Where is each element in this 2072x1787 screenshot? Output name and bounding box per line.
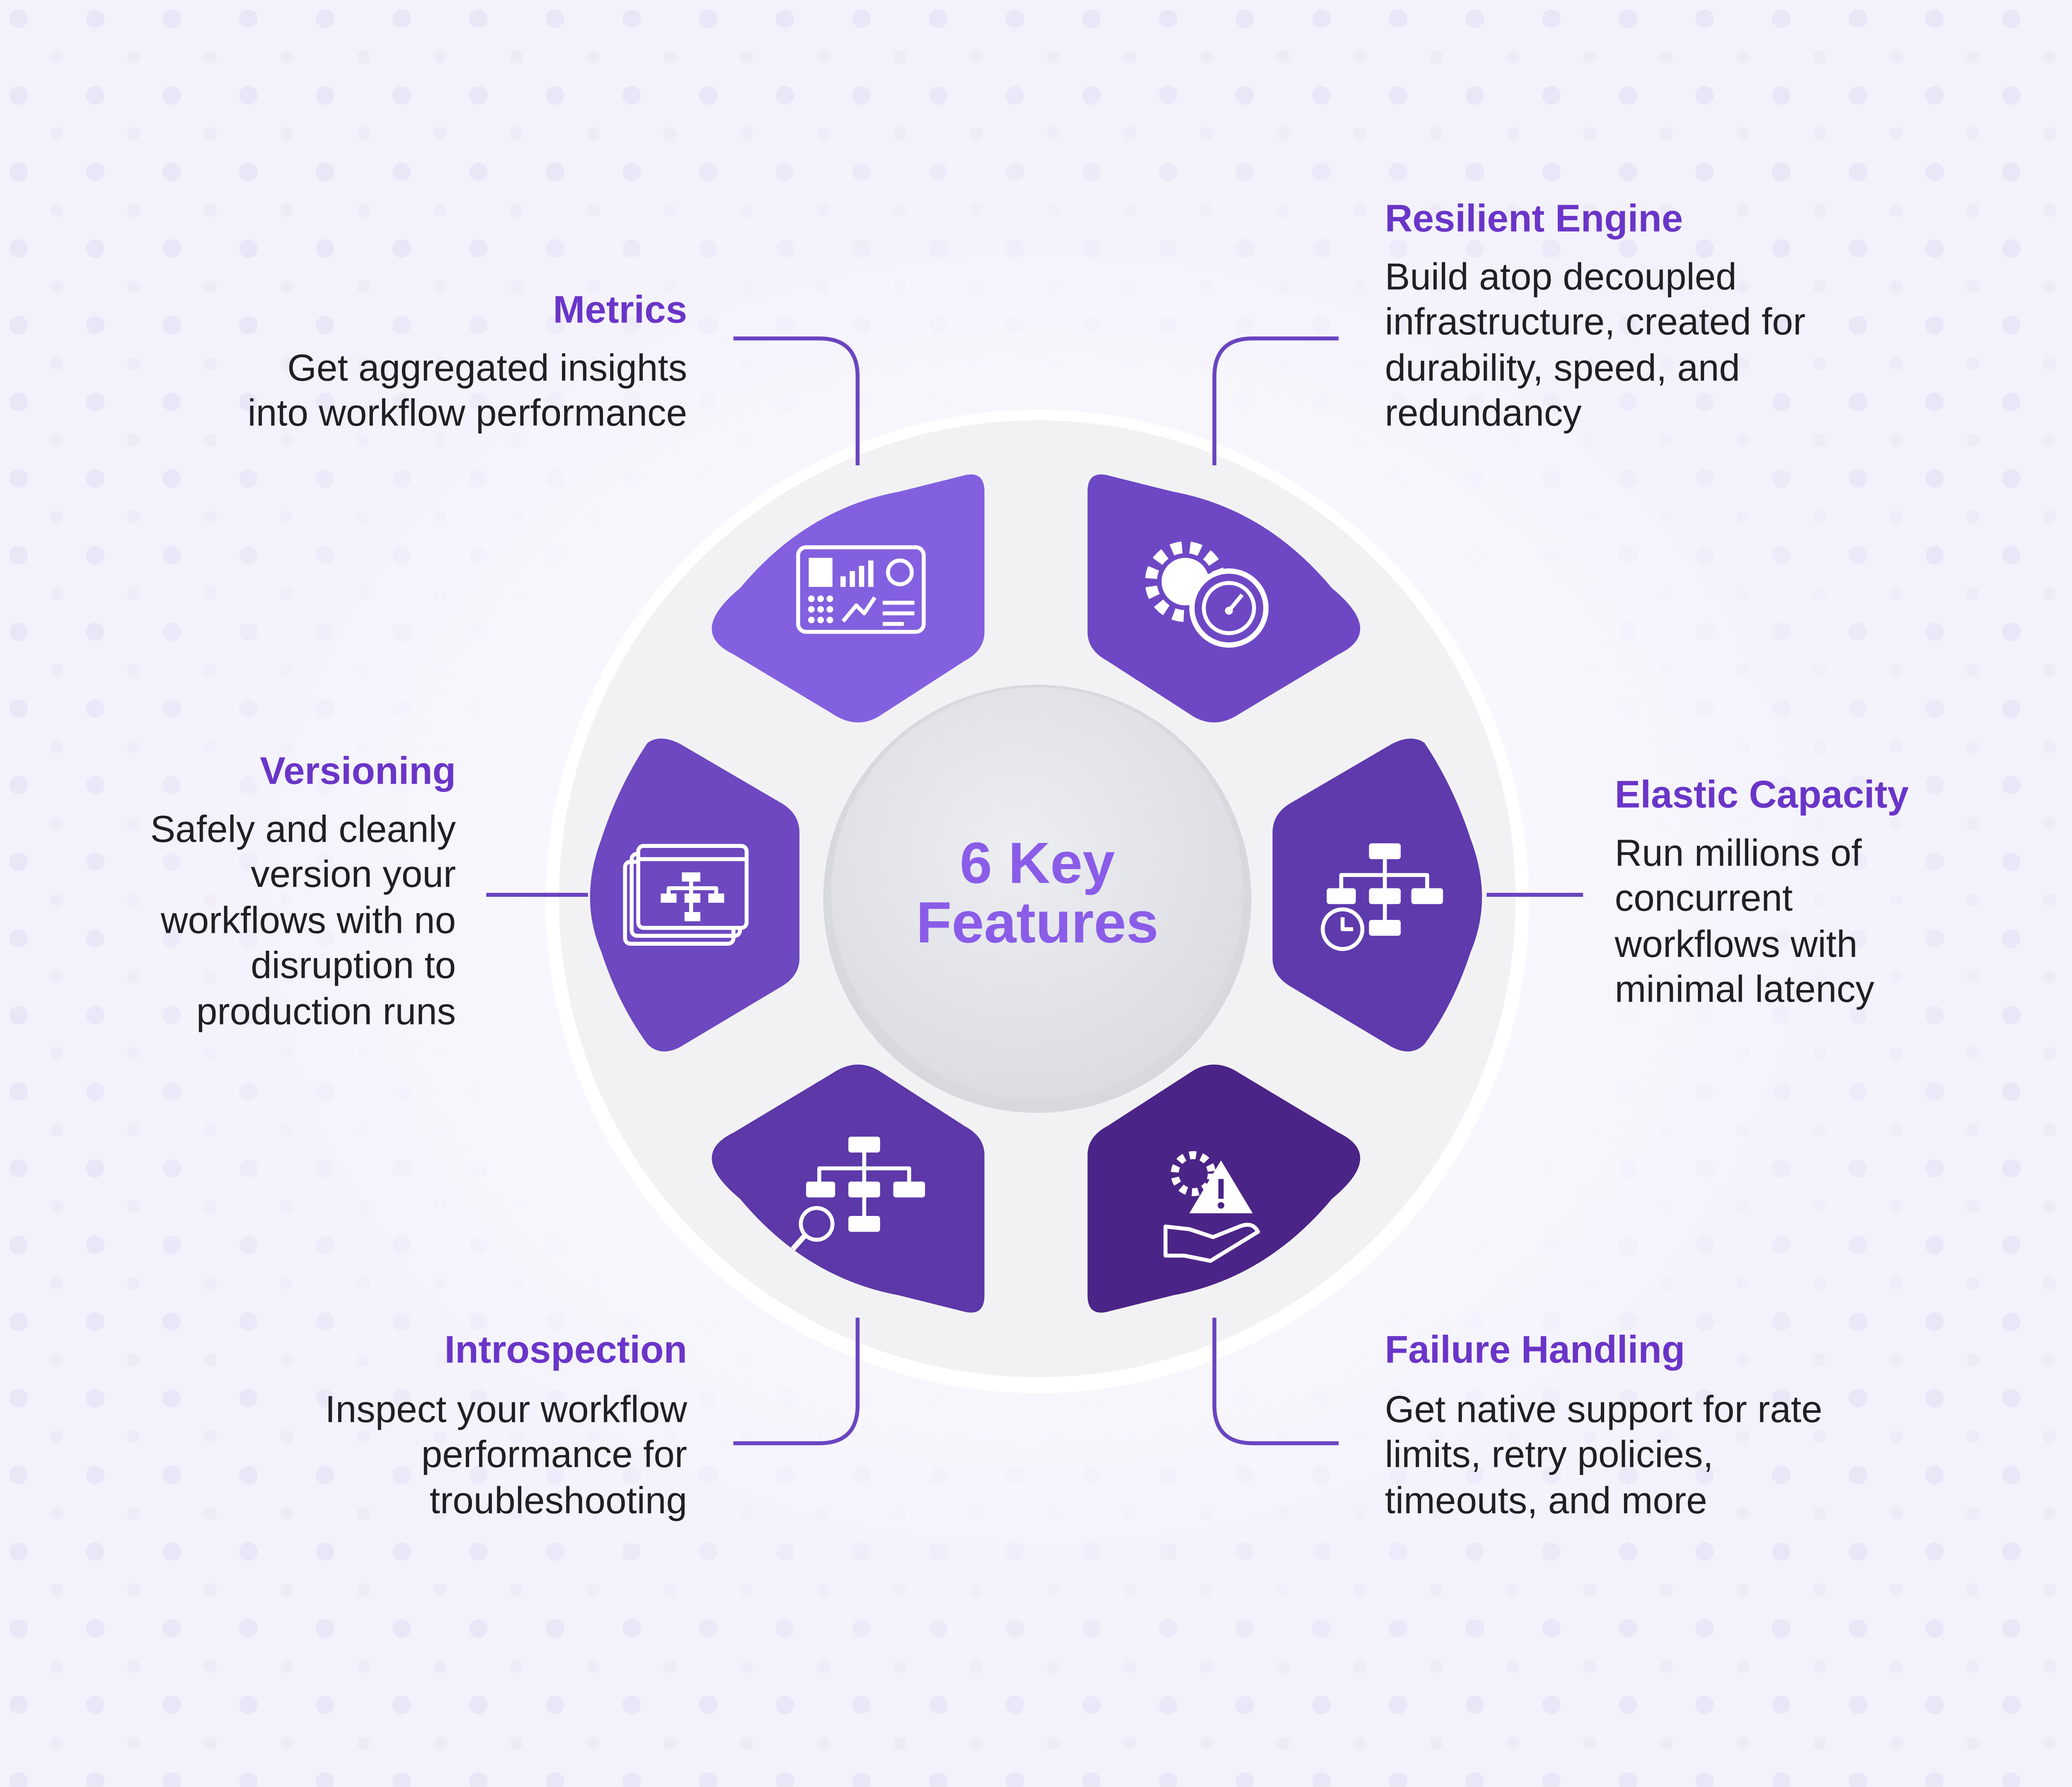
icon: scaling tree	[1323, 843, 1443, 949]
connector: introspection	[733, 1318, 858, 1443]
title: 6 Key	[960, 830, 1115, 895]
text: versioning: production runs	[196, 991, 456, 1033]
petal: introspection	[712, 1065, 985, 1312]
text: failure handling: Failure Handling	[1385, 1328, 1685, 1371]
text: versioning: Versioning	[260, 749, 456, 792]
text: introspection: Inspect your workflow	[325, 1389, 687, 1431]
text: resilient engine	[1385, 196, 1806, 434]
text: elastic capacity: Run millions of	[1615, 832, 1862, 874]
text: elastic capacity: Elastic Capacity	[1615, 773, 1909, 816]
text: elastic capacity: workflows with	[1615, 923, 1857, 965]
text: elastic capacity: minimal latency	[1615, 968, 1874, 1010]
petal: metrics	[712, 475, 985, 722]
text: resilient engine: infrastructure, created for	[1385, 301, 1806, 343]
text: metrics: Get aggregated insights	[287, 347, 687, 389]
text: failure handling	[1385, 1328, 1823, 1522]
petal: elastic capacity	[1273, 739, 1482, 1051]
icon: search tree	[793, 1137, 925, 1249]
text: resilient engine: Resilient Engine	[1385, 196, 1683, 240]
text: elastic capacity	[1615, 773, 1909, 1010]
center circle	[823, 685, 1251, 1113]
text: failure handling: timeouts, and more	[1385, 1480, 1707, 1522]
connector: resilient engine	[1214, 339, 1339, 465]
icon: warning hand	[1165, 1155, 1258, 1261]
petal: versioning	[590, 739, 799, 1051]
text: introspection	[325, 1328, 687, 1522]
petal: failure handling	[1087, 1065, 1360, 1312]
text: resilient engine: Build atop decoupled	[1385, 256, 1737, 298]
connector: failure handling	[1214, 1318, 1339, 1443]
text: introspection: troubleshooting	[430, 1480, 687, 1522]
icon: versions	[625, 846, 747, 944]
text: versioning: Safely and cleanly	[150, 809, 456, 850]
connector: versioning	[486, 894, 588, 896]
connector: metrics	[733, 339, 858, 465]
text: versioning	[150, 749, 456, 1033]
icon: dashboard	[798, 547, 924, 632]
text: resilient engine: durability, speed, and	[1385, 347, 1740, 389]
text: failure handling: limits, retry policies,	[1385, 1433, 1714, 1475]
text: failure handling: Get native support for rate	[1385, 1389, 1823, 1431]
text: versioning: version your	[251, 853, 456, 895]
text: versioning: workflows with no	[160, 900, 456, 942]
text: metrics: into workflow performance	[248, 392, 687, 434]
text: resilient engine: redundancy	[1385, 392, 1582, 434]
text: versioning: disruption to	[251, 944, 456, 986]
petal: resilient engine	[1087, 475, 1360, 722]
text: metrics	[248, 288, 687, 434]
text: introspection: Introspection	[445, 1328, 687, 1371]
icon: gear and gauge	[1151, 547, 1266, 645]
title	[916, 830, 1159, 955]
outer ring	[546, 410, 1529, 1393]
text: elastic capacity: concurrent	[1615, 877, 1793, 919]
connector: elastic capacity	[1486, 894, 1583, 896]
text: introspection: performance for	[421, 1433, 687, 1475]
text: metrics: Metrics	[553, 288, 687, 331]
title: Features	[916, 890, 1159, 955]
